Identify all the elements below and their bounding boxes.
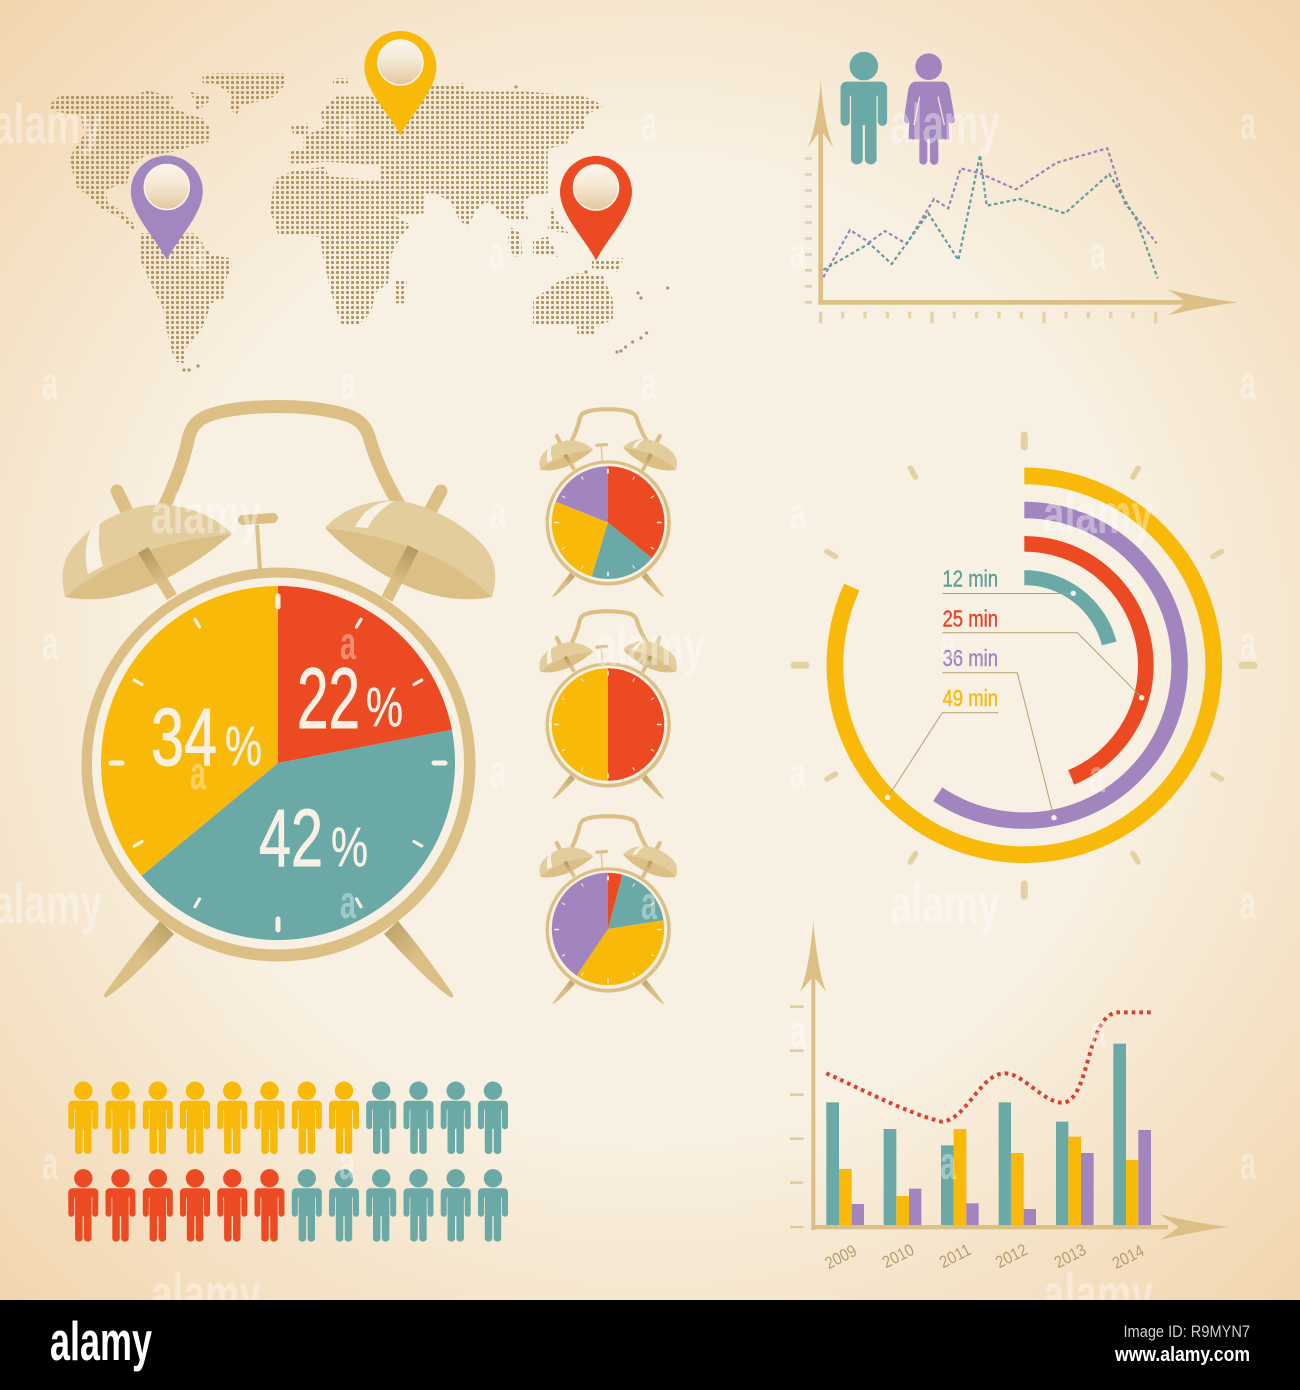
watermarks: alamy [595,614,705,677]
year labels: 2012 [992,1240,1031,1272]
map pin: purple [131,156,203,260]
people row 1 [68,1082,508,1154]
watermarks: a [1240,877,1256,929]
bars 2010 [884,1129,921,1225]
watermarks: alamy [151,1262,261,1325]
watermarks: alamy [890,92,1000,155]
year labels [822,1240,1147,1273]
watermarks: a [1090,1005,1106,1057]
radial time chart [794,435,1254,896]
arc: 49 min yellow [835,476,1214,855]
watermarks: a [42,357,58,409]
label: 22%: 22 [297,651,360,747]
watermarks: a [1090,227,1106,279]
y axis arrow [808,79,834,305]
watermarks: a [641,877,657,929]
label: 25 min: 25 min [942,606,998,632]
small clock 2 [539,611,677,799]
watermarks: a [1240,1137,1256,1189]
watermarks: a [1089,750,1105,802]
year labels: 2011 [936,1240,974,1272]
pie slice: 22% red [278,586,452,763]
small clock 3 [539,816,677,1004]
x axis arrow [811,1214,1230,1240]
line chart with man and woman [805,52,1238,323]
footer logo: alamy [50,1310,152,1372]
watermarks: a [1240,97,1256,149]
watermarks: alamy [1043,1262,1153,1325]
bars 2012 [999,1102,1036,1225]
watermarks: a [340,357,356,409]
year labels: 2009 [822,1241,860,1273]
watermarks: a [339,1137,355,1189]
watermarks: a [340,97,356,149]
large alarm clock [62,406,495,998]
watermarks: a [790,1005,806,1057]
watermarks: a [340,617,356,669]
arc: 25 min red [1024,544,1146,777]
x axis arrow [818,289,1238,315]
pie slice: 42% teal [142,730,455,940]
watermarks: a [1240,357,1256,409]
watermarks: a [489,227,505,279]
pie slice: 34% yellow [101,586,278,876]
watermarks: a [190,747,206,799]
dotted trend line [826,1012,1152,1122]
watermarks: a [940,617,956,669]
bars 2011 [941,1129,979,1225]
footer bar [0,1300,1300,1390]
watermarks: alamy [890,872,1000,935]
bars 2009 [826,1102,864,1225]
label: 22%: % [366,675,403,738]
watermarks: a [641,357,657,409]
bars 2013 [1056,1122,1094,1225]
dotted world map [50,73,670,372]
watermarks: a [190,227,206,279]
year labels: 2010 [879,1240,917,1272]
bars 2014 [1113,1044,1151,1225]
watermarks: a [790,747,806,799]
small clock 1 [539,409,677,597]
label: 34%: % [225,714,262,777]
y axis arrow [800,921,826,1230]
website: www.alamy.com [1114,1344,1250,1366]
watermarks: a [42,1137,58,1189]
watermarks: a [340,876,356,928]
label: 49 min: 49 min [942,685,998,711]
year labels: 2014 [1109,1241,1147,1273]
teal dashed line [823,155,1158,278]
watermarks: alamy [151,482,261,545]
map pin: red [560,156,632,260]
leader dots [885,591,1144,820]
people row 2 [68,1169,508,1242]
watermarks: a [790,487,806,539]
dial ticks [794,435,1254,896]
watermarks: a [940,1137,956,1189]
label: 36 min: 36 min [942,645,998,671]
icon: woman [904,53,955,165]
label: 12 min: 12 min [942,566,998,592]
label: 42%: 42 [259,793,323,884]
watermarks: a [641,97,657,149]
purple dashed line [823,148,1157,277]
watermarks: a [42,617,58,669]
label: 34%: 34 [151,692,217,783]
leader lines [888,594,1142,818]
watermarks: alamy [1043,482,1153,545]
arc: 36 min purple [938,510,1180,821]
bar chart 2009-2014 [790,921,1230,1240]
y axis ticks [790,1007,803,1227]
watermarks: a [1240,617,1256,669]
watermarks: a [790,227,806,279]
label: 42%: % [331,815,368,878]
icon: man [841,52,887,165]
watermarks: a [490,745,506,797]
map pin: yellow [364,31,436,136]
image id: Image ID: R9MYN7 [1124,1322,1250,1341]
arc: 12 min teal [1024,578,1109,644]
watermarks: a [490,486,506,538]
axis ticks [805,159,1156,323]
year labels: 2013 [1051,1240,1089,1272]
